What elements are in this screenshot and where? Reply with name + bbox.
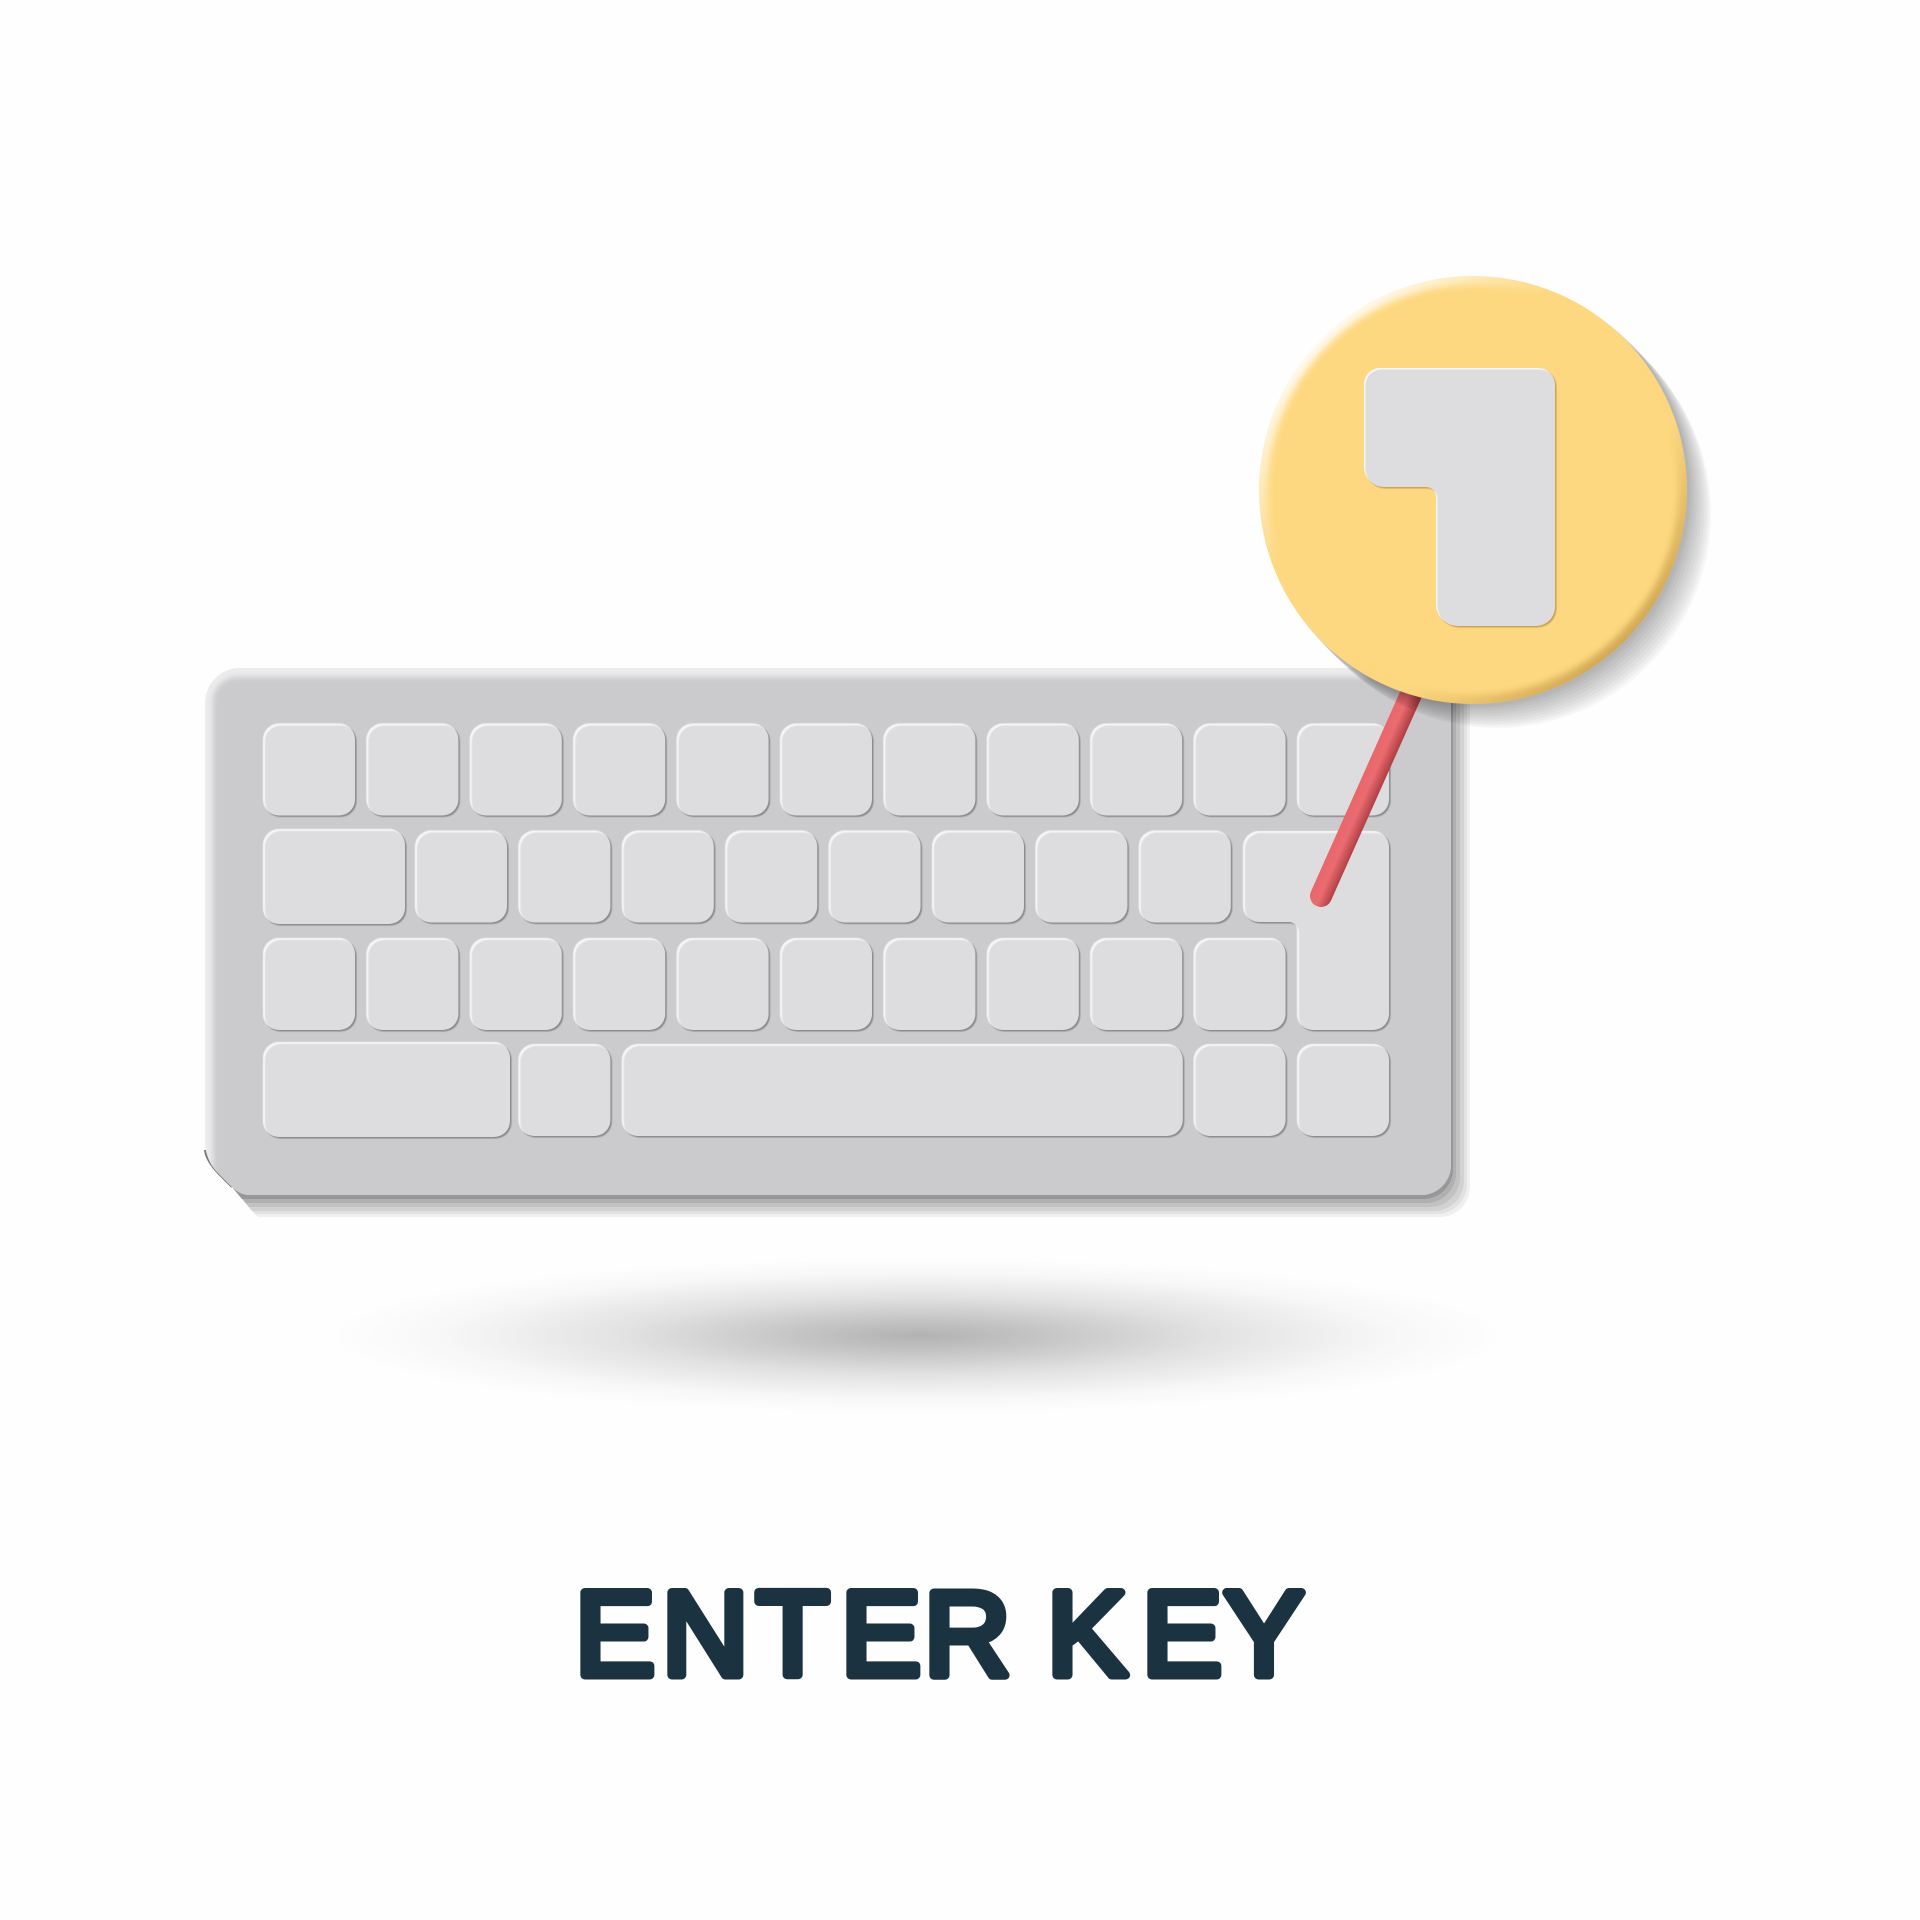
badge disc — [1259, 276, 1687, 704]
title: ENTER KEY — [575, 1567, 1304, 1701]
keyboard body — [204, 668, 1451, 1195]
keyboard — [204, 668, 1470, 1217]
callout badge — [1259, 276, 1711, 728]
third row keys — [263, 938, 1286, 1030]
callout pointer — [1321, 692, 1412, 896]
second row keys — [263, 829, 1231, 924]
ground shadow — [328, 1258, 1508, 1414]
number row keys — [263, 724, 1389, 816]
enter key icon — [1364, 368, 1555, 626]
bottom row keys — [263, 1042, 1389, 1137]
keyboard cast shadow — [232, 700, 1470, 1217]
enter key on keyboard — [1243, 831, 1389, 1030]
badge shadow — [1260, 277, 1711, 728]
